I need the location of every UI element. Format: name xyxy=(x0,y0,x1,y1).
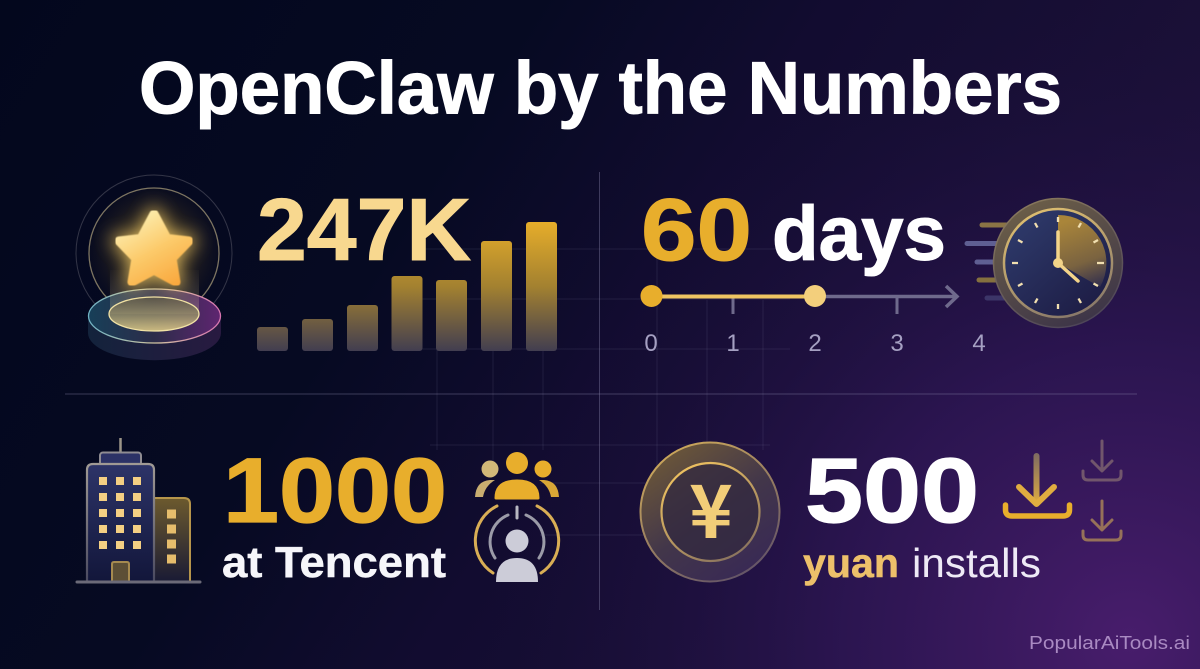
bar chart xyxy=(257,222,557,351)
timeline: 0 xyxy=(644,330,658,357)
icon: office building xyxy=(77,438,200,582)
icon: team and user xyxy=(475,452,559,582)
icon: yuan coin: ¥ xyxy=(689,453,733,560)
stat: 500: 500 xyxy=(805,440,979,542)
timeline: 4 xyxy=(972,330,986,357)
label: yuan installs: installs xyxy=(912,540,1041,586)
panel: GitHub stars xyxy=(76,175,557,360)
stat: 60 days: 60 xyxy=(641,180,752,279)
panel: 60 days: days xyxy=(772,191,946,277)
watermark: PopularAiTools.ai xyxy=(1029,633,1190,653)
timeline xyxy=(640,285,986,357)
timeline: 1 xyxy=(726,330,740,357)
icon: download arrows xyxy=(1006,441,1121,540)
panel: 1000 at Tencent xyxy=(77,438,559,587)
panel: 500 yuan installs xyxy=(640,440,1121,586)
stat: 247K: 247K xyxy=(257,180,471,279)
timeline: 3 xyxy=(890,330,904,357)
label: yuan installs xyxy=(803,540,1041,586)
icon: yuan coin xyxy=(640,442,780,582)
label: yuan installs: yuan xyxy=(803,540,899,586)
label: at Tencent: at Tencent xyxy=(222,538,446,587)
icon: glowing star on platform xyxy=(76,175,232,360)
stat: 1000: 1000 xyxy=(223,440,447,542)
panel: 60 days xyxy=(640,180,1122,357)
icon: speeding clock xyxy=(967,198,1122,328)
timeline: 2 xyxy=(808,330,822,357)
title: OpenClaw by the Numbers xyxy=(139,46,1062,130)
